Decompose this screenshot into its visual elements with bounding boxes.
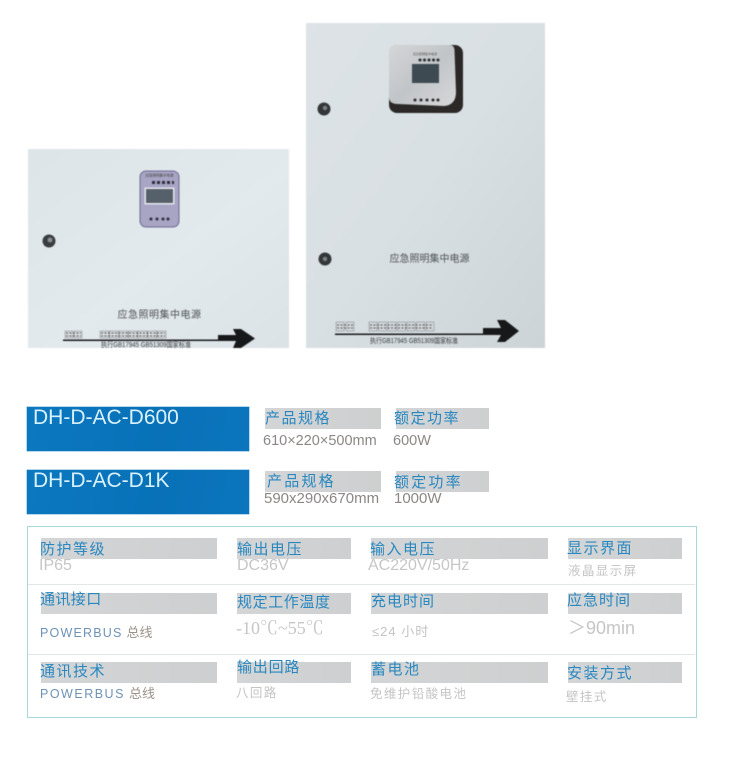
cell: protection level: IP65 [39,557,72,574]
lower door lock [318,252,332,266]
cell: protection level [39,538,217,574]
cabinet title: 应急照明集中电源 [118,308,202,321]
cell: installation method [566,662,682,704]
cell: battery [370,661,548,701]
cell: working temperature: 规定工作温度 [237,594,331,611]
base line and arrow [335,320,519,342]
cell: communication technology [40,662,217,701]
cell: output voltage: 输出电压 [237,541,303,558]
cell: charging time: ≤24 小时 [372,624,429,639]
cell: display interface: 液晶显示屏 [568,564,638,578]
cell: communication port: 通讯接口 [40,591,102,608]
model banner: DH-D-AC-D1K [27,470,249,514]
cell: battery: 蓄电池 [371,661,421,678]
cell: output circuits: 输出回路 [237,659,300,676]
base line and arrow [63,329,255,348]
cell: display interface: 显示界面 [567,540,633,557]
model banner: DH-D-AC-D1K: DH-D-AC-D1K [33,469,170,492]
control panel: silver display module: 应急照明集中电源 [413,51,437,56]
spec: product size D1K [264,471,381,507]
cell: working temperature: -10℃~55℃ [236,618,324,638]
cell: installation method: 壁挂式 [566,690,608,704]
cell: communication port: POWERBUS 总线 [40,625,153,640]
product photo: small wall cabinet [28,148,290,349]
cell: display interface [567,538,682,578]
spec: product size D1K: 产品规格 [267,473,336,490]
indicator label strip [65,331,166,338]
cell: installation method: 安装方式 [567,665,633,682]
spec: product size D600: 610×220×500mm [263,433,377,449]
door lock [42,234,56,248]
spec: rated power D1K: 1000W [394,490,442,507]
cell: charging time [371,593,548,639]
cell: communication technology: 通讯技术 [40,663,106,680]
cell: output voltage: DC36V [237,557,289,574]
cell: output circuits: 八回路 [236,686,278,700]
parameter table frame [27,526,697,718]
model banner: DH-D-AC-D600: DH-D-AC-D600 [33,406,179,428]
upper door lock [318,102,330,116]
cell: input voltage: AC220V/50Hz [368,557,469,574]
spec: rated power D600 [393,408,489,449]
control panel: silver display module [389,45,463,113]
cell: input voltage: 输入电压 [370,541,436,558]
spec: rated power D600: 额定功率 [394,410,460,427]
spec: product size D1K: 590x290x670mm [264,490,379,507]
model banner: DH-D-AC-D600 [27,406,249,450]
cell: communication technology: POWERBUS 总线 [40,686,155,701]
control panel: purple display module: 应急照明集中电源 [146,172,174,178]
indicator label strip [336,322,434,331]
cell: communication port [40,591,217,640]
spec: rated power D1K [394,471,489,507]
cell: battery: 免维护铅酸电池 [370,687,467,701]
cell: emergency time [567,592,682,638]
spec: product size D600 [263,408,381,449]
cell: output circuits [236,659,351,700]
cell: working temperature [236,593,351,638]
cell: input voltage [368,538,548,574]
cell: output voltage [237,538,351,574]
control panel: purple display module [140,171,179,227]
cell: protection level: 防护等级 [40,541,106,558]
product photo: tall wall cabinet [306,22,546,348]
spec: product size D600: 产品规格 [265,410,331,427]
cabinet title: 应急照明集中电源 [390,252,470,265]
spec: rated power D1K: 额定功率 [394,474,463,491]
cell: charging time: 充电时间 [371,593,435,610]
cell: emergency time: ＞90min [568,618,635,638]
spec: rated power D600: 600W [393,433,431,449]
cell: emergency time: 应急时间 [567,592,631,609]
standard note: 执行GB17945 GB51309国家标准 [370,336,458,345]
